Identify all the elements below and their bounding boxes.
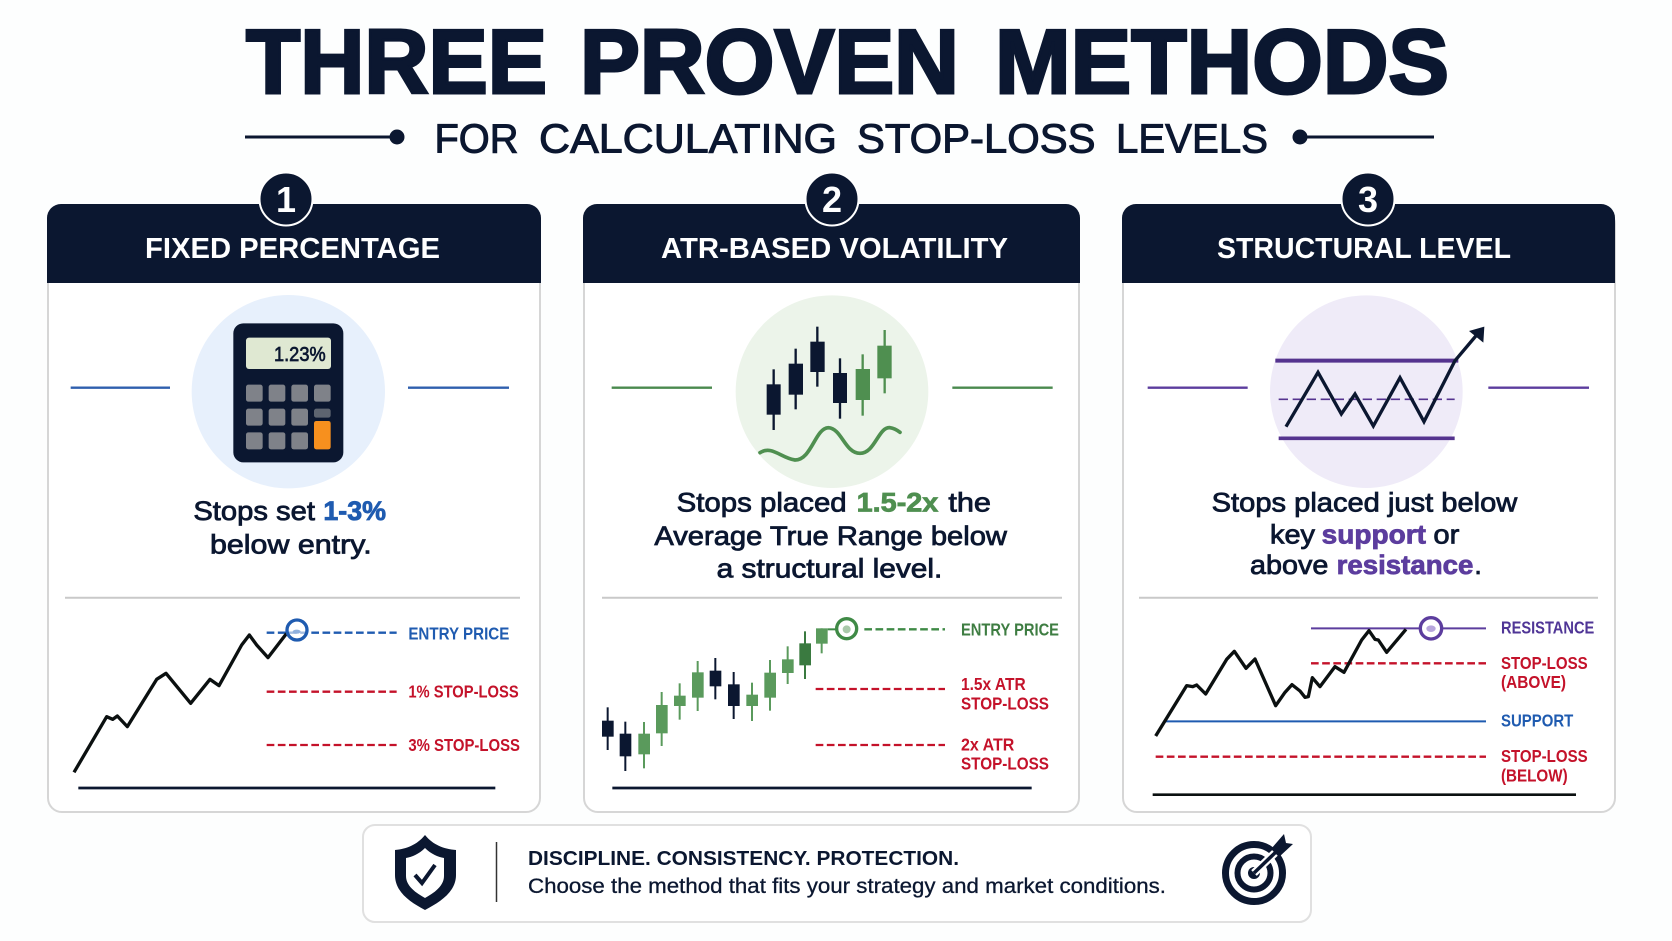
description: ATR-based volatility: Average True Range below bbox=[654, 521, 1008, 551]
icon: candlesticks and wave bbox=[612, 295, 1053, 488]
description: structural level: above bbox=[1250, 550, 1328, 580]
description: structural level: resistance bbox=[1337, 550, 1473, 580]
chart: support and resistance stop levels: STOP-LOSS bbox=[1501, 653, 1588, 673]
number badge 3 bbox=[1342, 172, 1394, 226]
panel: fixed percentage bbox=[47, 172, 541, 812]
chart: entry and percent stop levels: 3% STOP-LOSS bbox=[408, 735, 520, 755]
panel: structural level bbox=[1122, 172, 1615, 812]
chart: entry and percent stop levels bbox=[74, 620, 520, 788]
subtitle with dot-ended rules: FOR bbox=[434, 116, 518, 162]
number badge 2: 2 bbox=[822, 179, 842, 220]
title: THREE bbox=[246, 12, 547, 113]
panel header: ATR-based volatility bbox=[583, 204, 1080, 283]
description: fixed percentage: below entry. bbox=[210, 529, 372, 559]
chart: support and resistance stop levels bbox=[1153, 618, 1594, 795]
icon: shield with check bbox=[395, 835, 456, 910]
chart: entry and percent stop levels: 1% STOP-LOSS bbox=[408, 682, 519, 702]
icon: calculator: 1.23% bbox=[274, 344, 326, 366]
description: ATR-based volatility: 1.5-2x bbox=[857, 488, 939, 518]
number badge 2 bbox=[806, 172, 858, 226]
number badge 1: 1 bbox=[276, 179, 296, 220]
description: ATR-based volatility: a structural level. bbox=[717, 554, 942, 584]
subtitle with dot-ended rules: LEVELS bbox=[1116, 116, 1268, 162]
subtitle with dot-ended rules bbox=[245, 116, 1434, 162]
number badge 1 bbox=[260, 172, 312, 226]
number badge 3: 3 bbox=[1358, 179, 1378, 220]
chart: support and resistance stop levels: STOP-LOSS bbox=[1501, 746, 1588, 766]
panel header: ATR-based volatility: ATR-BASED VOLATILITY bbox=[661, 233, 1008, 265]
chart: support and resistance stop levels: (ABOVE) bbox=[1501, 672, 1566, 692]
description: structural level: key bbox=[1270, 519, 1316, 549]
chart: support and resistance stop levels: RESISTANCE bbox=[1501, 618, 1594, 638]
chart: candlesticks with ATR stop levels: 1.5x ATR bbox=[961, 674, 1026, 694]
title: PROVEN bbox=[580, 12, 959, 113]
description: fixed percentage: 1-3% bbox=[323, 496, 386, 526]
description: structural level: Stops placed just below bbox=[1212, 488, 1518, 518]
chart: candlesticks with ATR stop levels: STOP-LOSS bbox=[961, 693, 1049, 713]
panel: ATR-based volatility bbox=[583, 172, 1080, 812]
panel header: structural level: STRUCTURAL LEVEL bbox=[1217, 233, 1511, 265]
icon: calculator bbox=[71, 295, 509, 488]
title: METHODS bbox=[995, 12, 1449, 113]
chart: candlesticks with ATR stop levels: STOP-LOSS bbox=[961, 753, 1049, 773]
chart: candlesticks with ATR stop levels: ENTRY PRICE bbox=[961, 619, 1059, 639]
footer message: DISCIPLINE. CONSISTENCY. PROTECTION. bbox=[528, 848, 959, 870]
chart: support and resistance stop levels: SUPPORT bbox=[1501, 711, 1574, 731]
subtitle with dot-ended rules: STOP-LOSS bbox=[857, 116, 1096, 162]
chart: candlesticks with ATR stop levels bbox=[602, 619, 1059, 788]
icon: range breakout with arrow bbox=[1148, 295, 1589, 488]
subtitle with dot-ended rules: CALCULATING bbox=[539, 116, 837, 162]
description: fixed percentage: Stops set bbox=[193, 496, 316, 526]
footer message bbox=[528, 848, 1166, 898]
panel header: fixed percentage: FIXED PERCENTAGE bbox=[145, 233, 440, 265]
description: structural level: support bbox=[1322, 519, 1426, 549]
footer message: Choose the method that fits your strategy and market conditions. bbox=[528, 875, 1166, 898]
chart: candlesticks with ATR stop levels: 2x ATR bbox=[961, 735, 1015, 755]
panel header: structural level bbox=[1122, 204, 1615, 283]
footer callout bbox=[363, 825, 1311, 922]
description: structural level: or bbox=[1433, 519, 1459, 549]
chart: support and resistance stop levels: (BELOW) bbox=[1501, 765, 1568, 785]
icon: target with arrow bbox=[1226, 834, 1293, 902]
description: ATR-based volatility: the bbox=[948, 488, 991, 518]
panel header: fixed percentage bbox=[47, 204, 541, 283]
description: structural level: . bbox=[1474, 550, 1482, 580]
chart: entry and percent stop levels: ENTRY PRICE bbox=[408, 623, 509, 643]
description: ATR-based volatility: Stops placed bbox=[677, 488, 847, 518]
